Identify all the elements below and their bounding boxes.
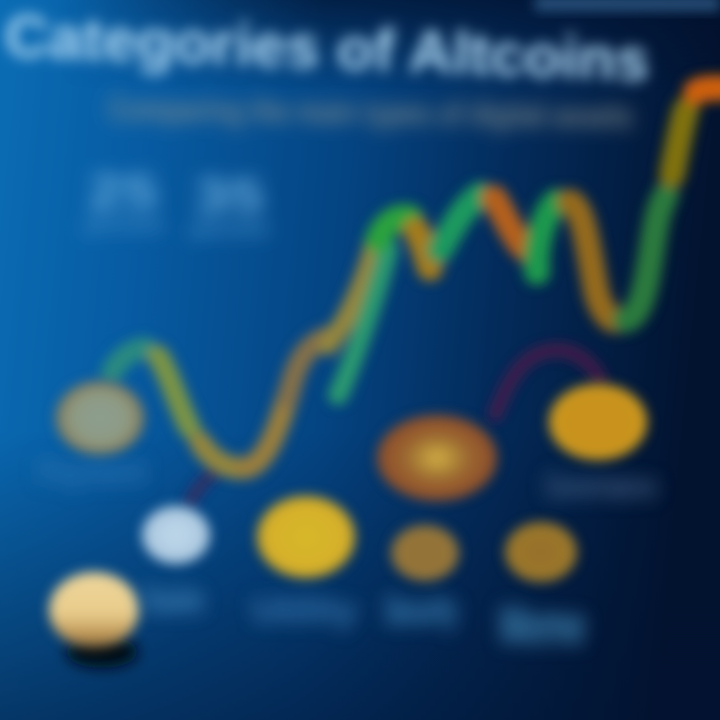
title: Categories of Altcoins bbox=[4, 2, 651, 94]
lower strand bbox=[112, 337, 328, 468]
coin: yellow bbox=[257, 496, 355, 578]
coin labels: Security bbox=[385, 586, 457, 633]
coin labels bbox=[38, 451, 657, 656]
label: tan orange coin: Meme bbox=[500, 593, 585, 656]
coin: orange bbox=[549, 384, 647, 460]
stat: left: percent bbox=[84, 211, 162, 238]
stat: right: percent bbox=[190, 215, 268, 242]
stat: left bbox=[84, 166, 162, 238]
coin: large brown bbox=[377, 415, 497, 501]
top-right caption bbox=[535, 0, 720, 11]
rising double strand bbox=[328, 238, 388, 395]
stat: right: 35 bbox=[194, 170, 264, 223]
coin: top left silver bbox=[56, 381, 144, 455]
coin: white bbox=[142, 506, 210, 564]
label: white coin: Stable bbox=[142, 579, 204, 620]
label: silver coin: Payment bbox=[38, 451, 146, 492]
stat: left: 25 bbox=[88, 166, 158, 219]
coin: cream with shadow bbox=[49, 572, 139, 668]
purple connector lines bbox=[190, 350, 600, 502]
coin: tan bbox=[391, 525, 459, 581]
stat: right bbox=[190, 170, 268, 242]
coin: tan orange bbox=[505, 522, 577, 582]
statistics bbox=[84, 166, 268, 242]
line chart: multicolor ribbon bbox=[112, 88, 720, 468]
label: yellow coin: Utility bbox=[252, 589, 357, 630]
upper strand bbox=[378, 88, 720, 320]
